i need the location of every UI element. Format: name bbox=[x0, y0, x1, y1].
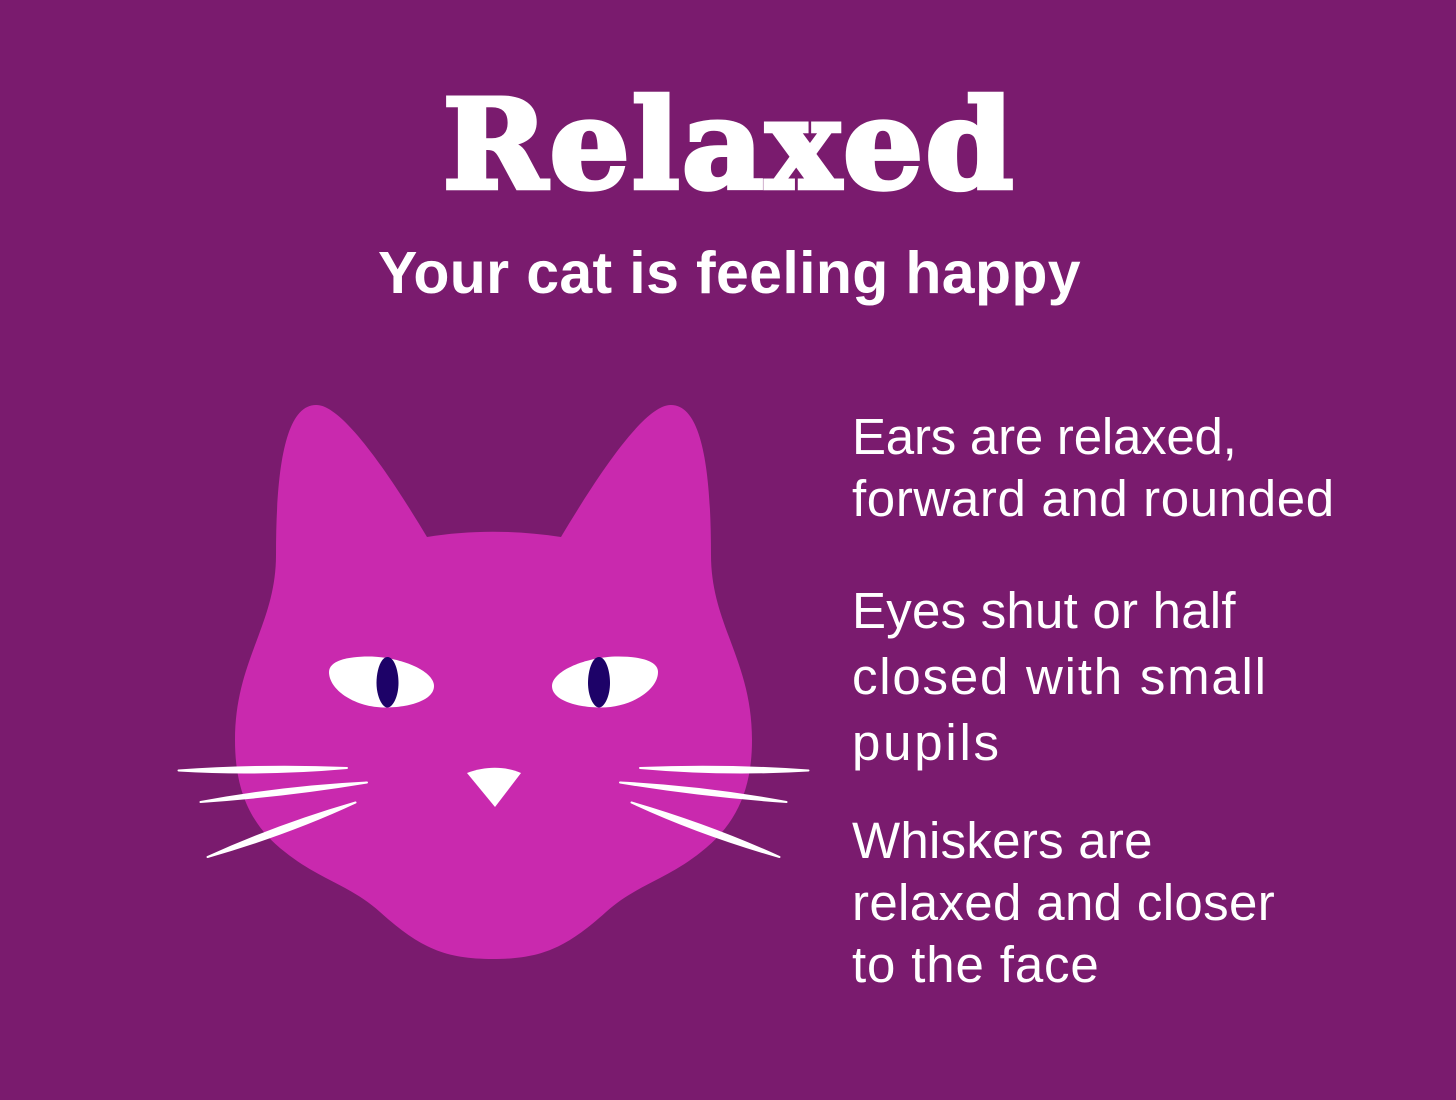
left eye bbox=[329, 656, 434, 708]
cat head bbox=[235, 405, 752, 959]
nose bbox=[467, 768, 521, 807]
right whiskers bbox=[620, 767, 808, 857]
text: whiskers: to the face bbox=[852, 936, 1100, 993]
right eye bbox=[552, 656, 658, 708]
text: whiskers bbox=[852, 812, 1275, 993]
left whiskers bbox=[178, 767, 367, 857]
text: ears: forward and rounded bbox=[852, 470, 1335, 527]
text: ears bbox=[852, 408, 1335, 527]
text: ears: Ears are relaxed, bbox=[852, 408, 1237, 465]
text: eyes: Eyes shut or half bbox=[852, 582, 1236, 639]
text: whiskers: Whiskers are bbox=[852, 812, 1153, 869]
text: whiskers: relaxed and closer bbox=[852, 874, 1275, 931]
text: eyes: closed with small bbox=[852, 648, 1268, 705]
text: eyes: pupils bbox=[852, 714, 1002, 771]
subtitle: Your cat is feeling happy bbox=[378, 240, 1081, 306]
text: eyes bbox=[852, 582, 1268, 771]
title: Relaxed bbox=[442, 73, 1016, 218]
